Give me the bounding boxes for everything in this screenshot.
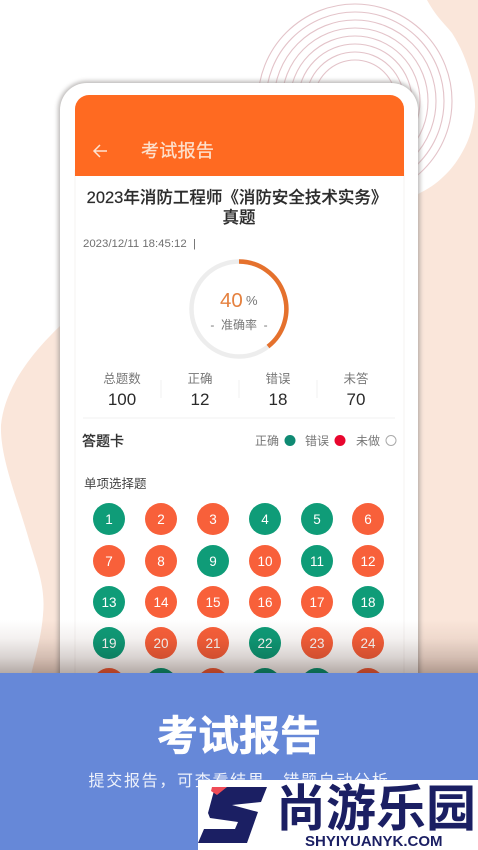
accuracy ring chart: % <box>246 293 258 308</box>
question number grid: 12 <box>360 554 376 569</box>
accuracy ring chart <box>192 262 286 356</box>
legend: 正确 <box>255 434 279 448</box>
background blob: left <box>1 326 60 680</box>
legend <box>255 433 396 448</box>
app header <box>75 95 404 176</box>
question number grid: 6 <box>364 512 372 527</box>
question number grid: 20 <box>153 636 169 651</box>
legend: 未做 <box>356 433 380 448</box>
question number grid: 16 <box>257 595 273 610</box>
timestamp: 2023/12/11 18:45:12 | <box>83 238 196 250</box>
question number grid: 5 <box>313 512 321 527</box>
question number grid: 22 <box>257 636 273 651</box>
question number grid: 13 <box>101 595 117 610</box>
icon: S mark <box>198 787 267 843</box>
stat: correct <box>187 372 213 409</box>
question number grid: 3 <box>209 512 217 527</box>
question number grid: 14 <box>153 595 169 610</box>
accuracy ring chart: 40 <box>220 289 243 312</box>
stat: correct: 12 <box>191 390 209 409</box>
question number grid: 2 <box>157 512 165 527</box>
header title: 考试报告 <box>141 141 214 161</box>
question number grid: 19 <box>101 636 117 651</box>
stat: total: 100 <box>108 390 136 409</box>
stat: unanswered <box>343 371 369 409</box>
stat: correct: 正确 <box>187 372 213 386</box>
question number grid: 21 <box>205 636 221 651</box>
question number grid: 15 <box>205 595 221 610</box>
stat: total <box>103 371 141 409</box>
question number grid: 18 <box>360 595 376 610</box>
bottom banner <box>0 673 478 850</box>
question number grid: 4 <box>261 512 269 527</box>
statistics row <box>103 371 369 409</box>
question number grid: 1 <box>105 512 113 527</box>
concentric rings <box>258 4 452 198</box>
stat: wrong: 18 <box>269 390 287 409</box>
question number grid <box>93 503 384 673</box>
phone frame <box>58 81 420 723</box>
question number grid: 9 <box>209 554 217 569</box>
answer card heading: 答题卡 <box>82 433 124 449</box>
watermark logo <box>198 780 478 850</box>
legend: 错误 <box>305 434 329 448</box>
stat: total: 总题数 <box>103 371 141 386</box>
stat: unanswered: 70 <box>347 390 365 409</box>
question number grid: 17 <box>309 595 325 610</box>
exam title: 真题 <box>222 208 256 227</box>
accuracy ring chart: - 准确率 - <box>210 317 268 332</box>
banner title: 考试报告 <box>157 713 321 759</box>
question number grid: 24 <box>360 636 376 651</box>
question number grid: 8 <box>157 554 165 569</box>
logo wordmark: 尚游乐园 <box>276 781 476 837</box>
question number grid: 10 <box>257 554 273 569</box>
question number grid: 23 <box>309 636 325 651</box>
stat: wrong <box>265 372 291 409</box>
exam title <box>87 187 387 227</box>
logo url: SHYIYUANYK.COM <box>305 833 443 850</box>
question number grid: 7 <box>105 554 113 569</box>
icon: back arrow <box>94 145 107 157</box>
question number grid: 11 <box>310 554 324 569</box>
background blob: top right <box>418 0 478 680</box>
stat: unanswered: 未答 <box>343 371 369 386</box>
banner subtitle: 提交报告，可查看结果，错题自动分析 <box>89 772 389 790</box>
stat: wrong: 错误 <box>265 372 291 386</box>
exam title: 2023年消防工程师《消防安全技术实务》 <box>87 187 387 207</box>
section label: 单项选择题 <box>84 477 147 491</box>
